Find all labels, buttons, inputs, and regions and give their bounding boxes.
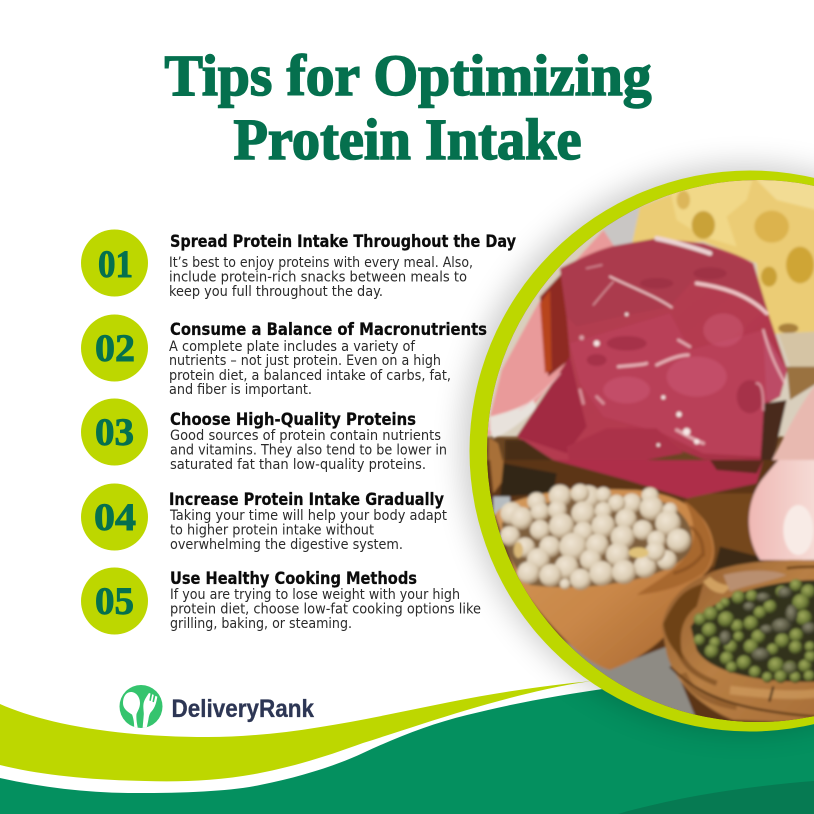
body 03: saturated fat than low-quality proteins. bbox=[170, 457, 426, 473]
body 04: overwhelming the digestive system. bbox=[170, 537, 403, 553]
body 02: protein diet, a balanced intake of carbs, fat, bbox=[169, 368, 451, 384]
body 05 bbox=[170, 587, 481, 632]
photo of protein foods bbox=[470, 170, 814, 740]
body 04: to higher protein intake without bbox=[170, 522, 375, 538]
chickpeas bbox=[500, 484, 691, 590]
number badge 03 bbox=[81, 398, 148, 466]
body 05: If you are trying to lose weight with your high bbox=[170, 587, 460, 603]
body 01: include protein-rich snacks between meals to bbox=[169, 270, 467, 286]
number badge 01: 01 bbox=[98, 243, 133, 286]
lower photo: bowls and chicken bbox=[487, 458, 814, 722]
left pale meat bbox=[487, 230, 617, 437]
tip 02 bbox=[81, 314, 487, 398]
tip 01 bbox=[81, 230, 516, 300]
body 05: grilling, baking, or steaming. bbox=[170, 616, 352, 632]
chicken bbox=[770, 386, 814, 462]
body 03: Good sources of protein contain nutrients bbox=[170, 428, 441, 444]
meat bottom edge bbox=[553, 460, 763, 498]
wave: green base bbox=[0, 660, 814, 814]
upper photo: cheese and meat bbox=[487, 180, 814, 462]
body 03 bbox=[170, 428, 447, 473]
body 02: nutrients – not just protein. Even on a high bbox=[169, 353, 441, 369]
number badge 02: 02 bbox=[95, 327, 135, 370]
mung beans bbox=[694, 579, 814, 683]
body 01 bbox=[169, 255, 473, 300]
title: Tips for Optimizing bbox=[164, 43, 652, 108]
body 02 bbox=[169, 339, 451, 398]
body 02: A complete plate includes a variety of bbox=[169, 339, 416, 355]
body 02: and fiber is important. bbox=[169, 382, 312, 398]
heading 04: Increase Protein Intake Gradually bbox=[169, 490, 444, 509]
title bbox=[164, 43, 652, 172]
body 01: It’s best to enjoy proteins with every meal. Also, bbox=[169, 255, 473, 271]
body 01: keep you full throughout the day. bbox=[169, 284, 383, 300]
chicken bbox=[749, 460, 814, 560]
photo ring bbox=[470, 170, 814, 732]
body 05: protein diet, choose low-fat cooking options like bbox=[170, 602, 481, 618]
tip 04 bbox=[81, 484, 448, 553]
body 04 bbox=[169, 508, 448, 553]
number badge 05: 05 bbox=[95, 580, 134, 623]
meat mottling bbox=[587, 267, 763, 413]
number badge 02 bbox=[81, 314, 148, 382]
body 03: and vitamins. They also tend to be lower in bbox=[170, 442, 447, 458]
wave: lime band bbox=[0, 681, 592, 781]
number badge 03: 03 bbox=[95, 411, 134, 454]
tip 05 bbox=[81, 568, 481, 634]
number badge 04 bbox=[81, 484, 148, 550]
ring shadow bbox=[462, 165, 814, 731]
bowl: mung beans bbox=[662, 560, 814, 723]
logo: DeliveryRank bbox=[120, 685, 314, 730]
heading 03: Choose High-Quality Proteins bbox=[170, 410, 416, 429]
wood corner bbox=[487, 436, 504, 462]
icon: spoon and fork bbox=[120, 685, 162, 730]
marbling bbox=[520, 238, 785, 443]
wordmark: DeliveryRank bbox=[172, 695, 314, 723]
title: Protein Intake bbox=[234, 107, 582, 172]
heading 05: Use Healthy Cooking Methods bbox=[170, 569, 417, 588]
main red meat bbox=[517, 238, 787, 468]
footer waves bbox=[0, 660, 814, 814]
wave: dark green corner bbox=[618, 781, 814, 814]
cheese bbox=[632, 177, 814, 335]
gray table bbox=[562, 638, 697, 715]
bowl: chickpeas bbox=[495, 488, 714, 670]
number badge 01 bbox=[81, 230, 148, 296]
body 04: Taking your time will help your body adapt bbox=[169, 508, 448, 524]
heading 02: Consume a Balance of Macronutrients bbox=[170, 320, 487, 339]
number badge 05 bbox=[81, 568, 148, 634]
number badge 04: 04 bbox=[94, 496, 136, 539]
tip 03 bbox=[81, 398, 447, 473]
heading 01: Spread Protein Intake Throughout the Day bbox=[170, 232, 516, 251]
